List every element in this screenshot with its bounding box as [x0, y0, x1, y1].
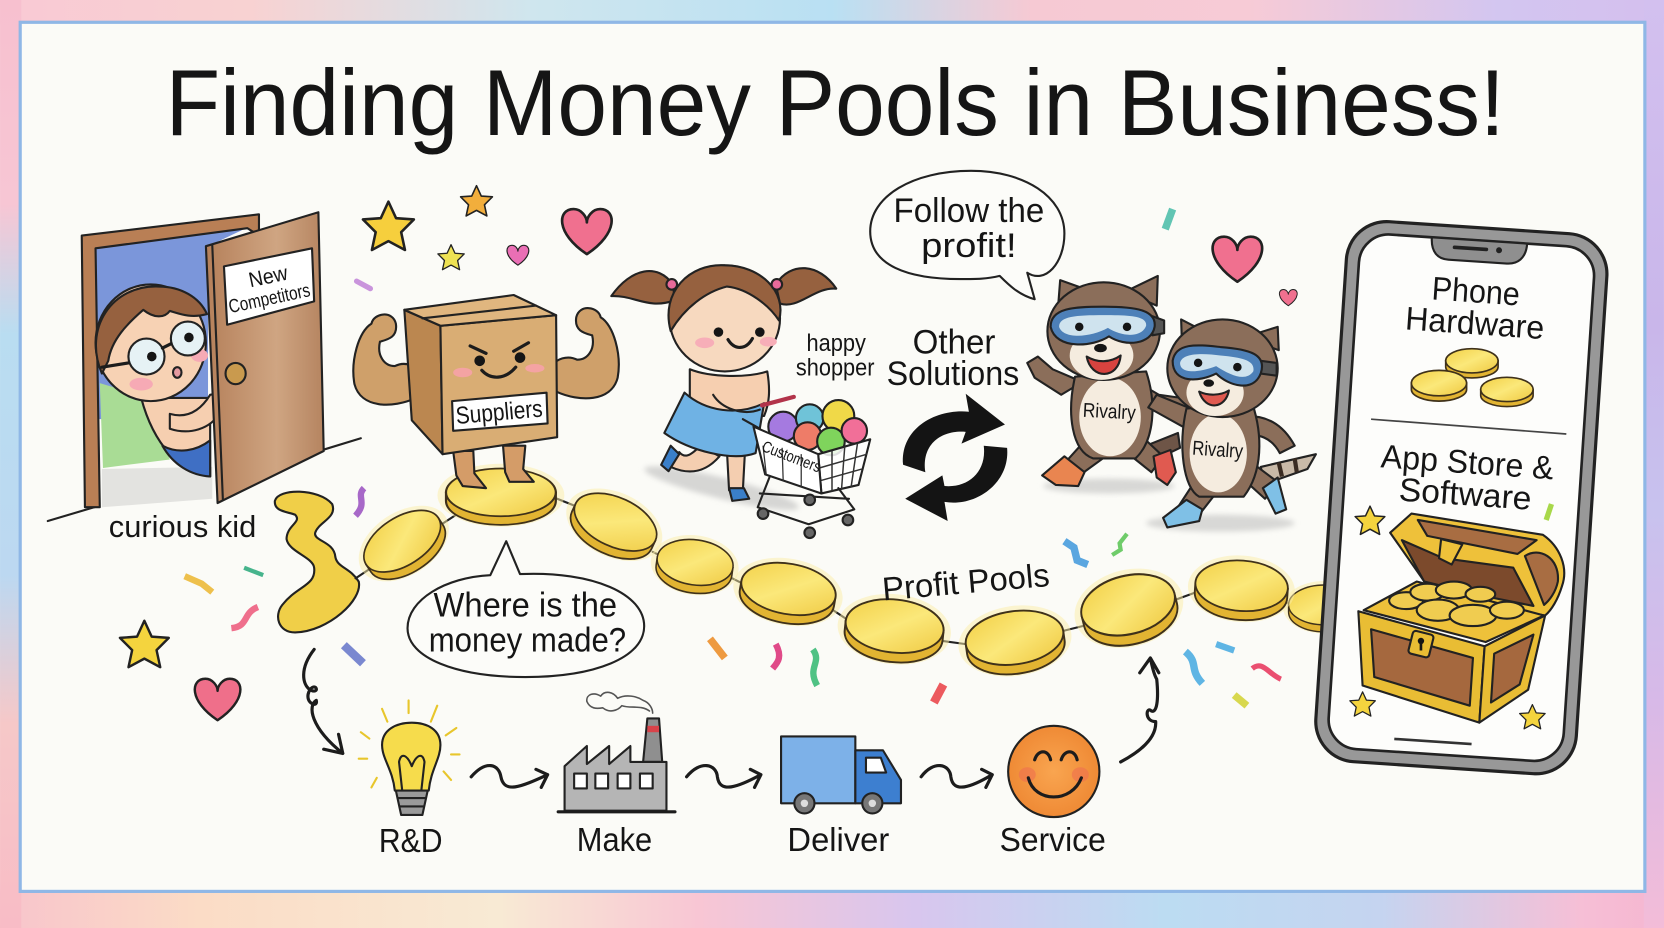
floor shadow: [102, 467, 212, 507]
cart: Customers: [759, 438, 823, 476]
phone hardware label: Hardware: [1404, 299, 1545, 346]
chest lock: [1408, 630, 1434, 658]
door panel: [206, 212, 324, 503]
door sign: Competitors: [227, 280, 312, 318]
label: curious kid: curious kid: [109, 509, 256, 544]
shadow: [1043, 479, 1175, 493]
confetti upper right: [1165, 209, 1297, 306]
speech bubble: where is the money made: Where is the: [434, 587, 617, 625]
app store label: App Store &: [1380, 437, 1555, 486]
shoes: [1163, 500, 1202, 527]
label: happy shopper: [796, 330, 874, 382]
app store label: [1380, 437, 1555, 517]
arms: [1148, 395, 1191, 429]
label: make: Make: [577, 821, 652, 858]
coin: edge at phone: [1283, 581, 1366, 634]
body: [1071, 371, 1152, 458]
chest front: [1358, 611, 1485, 723]
speech bubble: follow the profit: profit!: [921, 227, 1017, 265]
coin trail: [345, 464, 1366, 684]
grass through doorway: [100, 383, 170, 468]
label: other solutions: [887, 323, 1019, 393]
doorway with curious kid: [82, 212, 324, 507]
head: [1047, 282, 1160, 380]
icon: light bulb R&D: [359, 700, 460, 815]
three coins: [1411, 349, 1533, 407]
phone body: [1313, 219, 1610, 776]
legs and shoes: [661, 446, 749, 501]
arrow: coins to R&D: [304, 649, 343, 753]
confetti scattered: [185, 488, 1281, 706]
kid head: [96, 284, 208, 401]
stars and hearts above box: [357, 186, 612, 289]
goggles: [1173, 345, 1277, 386]
phone hardware label: Phone: [1431, 269, 1521, 312]
legs: [1061, 440, 1163, 473]
raccoon rival 2: [1146, 319, 1316, 532]
suppliers box character: [353, 295, 619, 488]
head: [666, 265, 782, 371]
treasure chest: [1350, 504, 1564, 729]
melted coin: [275, 492, 359, 632]
arrow: R&D to make: [471, 766, 548, 787]
arms: [713, 395, 760, 429]
box legs: [453, 446, 534, 488]
rivalry label: Rivalry: [1082, 400, 1137, 425]
box face: [453, 343, 544, 377]
app store label: Software: [1398, 471, 1533, 517]
shadow: [1146, 515, 1295, 532]
muscle arm right: [553, 308, 619, 398]
chest lid: [1390, 514, 1564, 615]
torso: [690, 369, 769, 416]
speech bubble: follow the profit: Follow the: [894, 192, 1044, 230]
ears: [1058, 276, 1158, 308]
icon: delivery truck: [781, 736, 901, 813]
raccoon rival 1: [1027, 276, 1189, 493]
arrow: deliver to service: [921, 766, 992, 787]
cart: [753, 397, 870, 538]
speech bubble: follow the profit: [870, 171, 1064, 299]
label: deliver: Deliver: [787, 821, 889, 858]
phone hardware label: [1404, 269, 1545, 346]
suppliers label: Suppliers: [455, 396, 544, 430]
icon: service smiley: [1008, 726, 1099, 817]
ground shadow: [642, 459, 801, 518]
goggles: [1051, 307, 1164, 344]
rivalry label: Rivalry: [1191, 438, 1245, 463]
shopper girl with cart: [611, 265, 870, 538]
muscle arm left: [353, 314, 419, 405]
box body: [404, 310, 443, 454]
coin trail connector: [356, 499, 1316, 644]
basket: [818, 439, 870, 493]
label: happy shopper: happy: [807, 330, 867, 357]
label: other solutions: Other: [913, 323, 995, 361]
star and heart lower left: [120, 621, 240, 720]
body: [1182, 403, 1259, 497]
speech bubble: where is the money made: [408, 541, 644, 677]
label: service: Service: [1000, 821, 1106, 858]
arrow: make to deliver: [687, 766, 761, 787]
sky through doorway: [96, 228, 246, 419]
shoes: [1042, 456, 1085, 486]
head: [1167, 319, 1278, 417]
label: other solutions: Solutions: [887, 355, 1019, 393]
stars around chest: [1350, 504, 1551, 729]
blue skirt: [664, 393, 764, 456]
cycle arrows: [903, 394, 1007, 521]
arms: [1027, 357, 1082, 395]
tail: [1146, 433, 1180, 462]
door frame: [82, 214, 259, 507]
door sign: New: [247, 262, 290, 292]
coin pile: [1364, 582, 1544, 642]
icon: factory: [558, 692, 675, 812]
mouth: [1199, 379, 1229, 405]
legs: [1178, 467, 1279, 515]
title: Finding Money Pools in Business!: [166, 50, 1505, 155]
mouth: [1087, 344, 1121, 374]
striped tail: [1261, 454, 1316, 484]
floor line behind door: [48, 438, 361, 521]
label: R&D: R&D: [379, 822, 443, 859]
ears: [1181, 319, 1279, 350]
kid body: [141, 394, 222, 476]
phone: [1313, 219, 1610, 776]
door knob: [226, 363, 246, 384]
door sign: [224, 248, 314, 325]
pigtails: [611, 271, 675, 304]
speech bubble: where is the money made: money made?: [429, 622, 626, 660]
label: profit pools: Profit Pools: [881, 556, 1051, 607]
cart frame and wheels: [758, 478, 854, 524]
balls: [768, 400, 867, 455]
chest side: [1479, 615, 1545, 723]
arrow: service to coins: [1121, 658, 1159, 762]
label: happy shopper: shopper: [796, 355, 874, 382]
glasses: [102, 322, 205, 375]
